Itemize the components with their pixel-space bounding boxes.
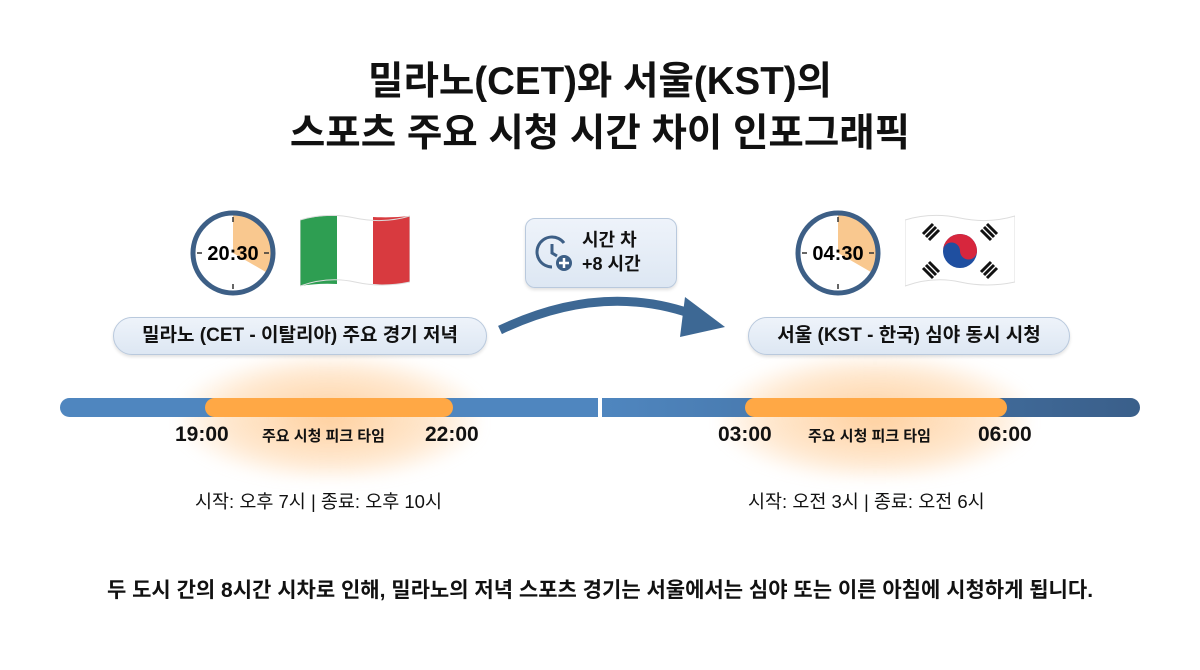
- peak bar seoul: [745, 398, 1007, 417]
- label: milan: [113, 317, 487, 355]
- icon: seoul clock: [796, 210, 880, 296]
- glow: seoul peak: [720, 355, 1030, 480]
- caption seoul: 시작: 오전 3시 | 종료: 오전 6시: [748, 491, 985, 512]
- title: [290, 60, 910, 155]
- arrow: [498, 296, 725, 337]
- labels seoul: 03:00: [718, 423, 772, 446]
- label: milan: 밀라노 (CET - 이탈리아) 주요 경기 저녁: [142, 325, 458, 346]
- timeline: seoul: [602, 398, 1140, 417]
- timeline: milan: [60, 398, 598, 417]
- icon: milan clock: 20:30: [207, 243, 259, 265]
- text: 06:00: [978, 423, 1032, 446]
- label: seoul: 서울 (KST - 한국) 심야 동시 시청: [777, 325, 1041, 346]
- labels milan: 19:00: [175, 423, 229, 446]
- text: 주요 시청 피크 타임: [808, 428, 931, 445]
- callout: time difference: [525, 218, 677, 288]
- label: seoul: [748, 317, 1070, 355]
- text: 주요 시청 피크 타임: [262, 428, 385, 445]
- icon: clock plus: [536, 236, 572, 271]
- icon: milan clock: [190, 210, 276, 296]
- icon: seoul clock: 04:30: [812, 243, 864, 265]
- icon: korea flag: [905, 215, 1015, 286]
- text: 22:00: [425, 423, 479, 446]
- callout: time difference: 시간 차: [582, 230, 637, 250]
- caption milan: 시작: 오후 7시 | 종료: 오후 10시: [195, 491, 442, 512]
- title: 스포츠 주요 시청 시간 차이 인포그래픽: [290, 112, 910, 155]
- title: 밀라노(CET)와 서울(KST)의: [368, 60, 832, 103]
- callout: time difference: +8 시간: [582, 254, 641, 274]
- icon: italy flag: [300, 215, 410, 286]
- peak bar milan: [205, 398, 453, 417]
- glow: milan peak: [180, 355, 480, 480]
- footer note: 두 도시 간의 8시간 시차로 인해, 밀라노의 저녁 스포츠 경기는 서울에서는 심야 또는 이른 아침에 시청하게 됩니다.: [107, 579, 1093, 602]
